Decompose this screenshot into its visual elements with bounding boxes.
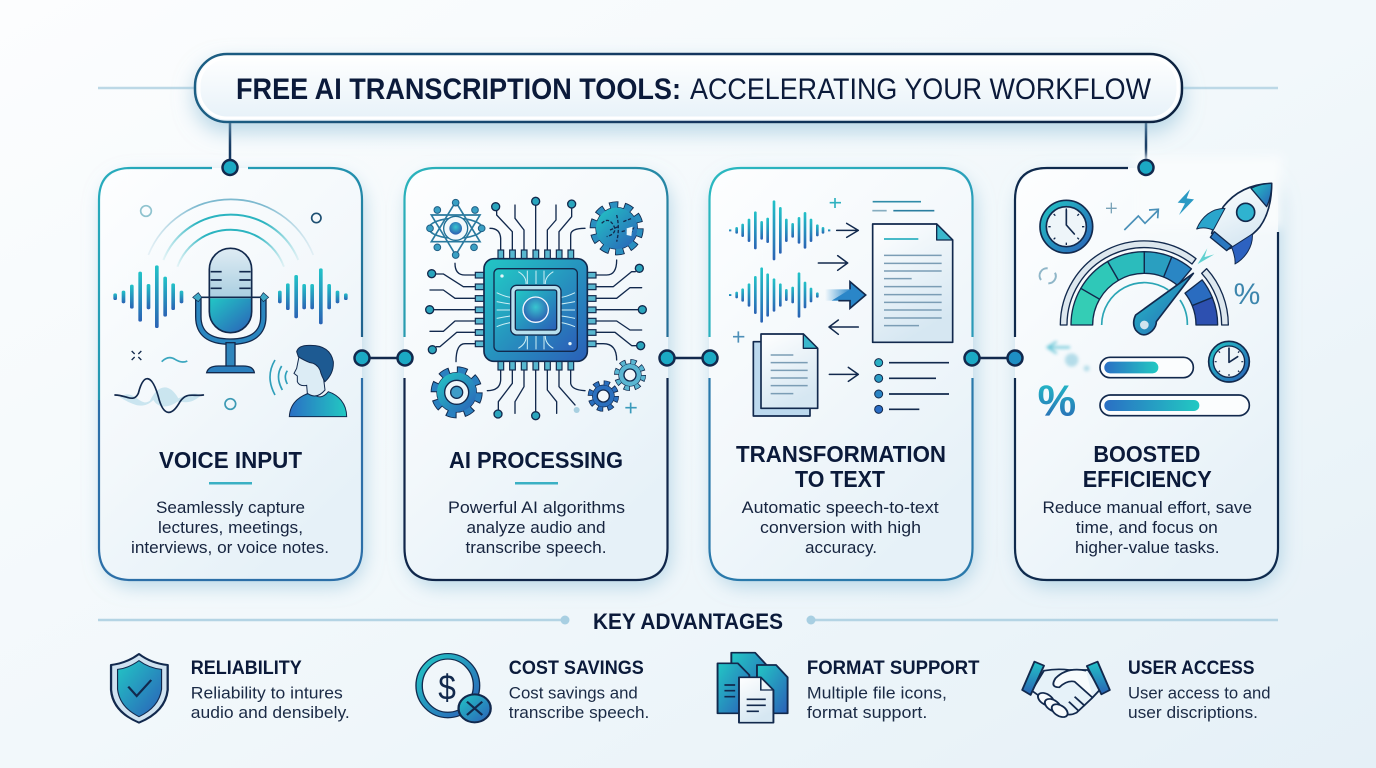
text: FORMAT SUPPORT bbox=[807, 658, 980, 679]
accent rule bbox=[515, 482, 558, 484]
text: audio and densibely. bbox=[191, 704, 350, 722]
advantage: user access bbox=[1022, 658, 1270, 722]
icon: audio waves converting to documents bbox=[729, 198, 953, 416]
advantage: reliability bbox=[111, 654, 350, 723]
heading: VOICE INPUT bbox=[159, 447, 302, 473]
section heading: key advantages bbox=[98, 609, 1278, 634]
title banner bbox=[98, 54, 1278, 160]
advantage: cost savings bbox=[419, 656, 649, 722]
body text bbox=[448, 499, 625, 557]
text bbox=[191, 658, 350, 722]
title banner: FREE AI TRANSCRIPTION TOOLS: bbox=[236, 73, 681, 106]
heading: TO TEXT bbox=[795, 466, 885, 492]
icon: small gear light bbox=[617, 362, 643, 388]
text: User access to and bbox=[1128, 684, 1270, 702]
body text bbox=[742, 499, 939, 557]
icon: file stack bbox=[718, 653, 788, 723]
icon: coin with cross: $ bbox=[438, 668, 456, 707]
icon: speedometer, rocket, clocks and progress bars bbox=[1038, 183, 1272, 425]
panel: boosted efficiency bbox=[1015, 156, 1282, 580]
title banner: ACCELERATING YOUR WORKFLOW bbox=[690, 73, 1152, 106]
text: RELIABILITY bbox=[191, 658, 302, 679]
text: user discriptions. bbox=[1128, 704, 1258, 722]
icon: speedometer, rocket, clocks and progress bars: % bbox=[1234, 278, 1260, 311]
icon: small gear dark bbox=[590, 383, 616, 409]
text: format support. bbox=[807, 704, 927, 722]
text: COST SAVINGS bbox=[509, 658, 644, 679]
body text: lectures, meetings, bbox=[158, 519, 303, 537]
icon: handshake bbox=[1022, 662, 1110, 720]
heading bbox=[736, 441, 946, 492]
connector dots: top bbox=[222, 160, 1154, 175]
icon: gear with neural pattern bbox=[594, 205, 640, 251]
accent rule bbox=[209, 482, 252, 484]
text: Reliability to intures bbox=[191, 684, 343, 702]
heading: AI PROCESSING bbox=[449, 447, 623, 473]
text bbox=[807, 658, 980, 722]
body text: Powerful AI algorithms bbox=[448, 499, 625, 517]
panel: AI processing bbox=[404, 168, 668, 580]
heading: BOOSTED bbox=[1093, 441, 1200, 467]
body text: Reduce manual effort, save bbox=[1042, 499, 1252, 517]
heading: TRANSFORMATION bbox=[736, 441, 946, 467]
body text: accuracy. bbox=[805, 539, 877, 557]
text: Cost savings and bbox=[509, 684, 638, 702]
icon: coin with cross bbox=[419, 656, 491, 722]
heading bbox=[1083, 441, 1212, 492]
body text: transcribe speech. bbox=[466, 539, 606, 557]
icon: shield bbox=[111, 654, 168, 723]
body text bbox=[1042, 499, 1252, 557]
body text: analyze audio and bbox=[466, 519, 606, 537]
body text: interviews, or voice notes. bbox=[131, 539, 329, 557]
body text: Automatic speech-to-text bbox=[742, 499, 939, 517]
text: Multiple file icons, bbox=[807, 684, 947, 702]
body text: higher-value tasks. bbox=[1075, 539, 1220, 557]
heading: EFFICIENCY bbox=[1083, 466, 1212, 492]
icon: microphone with sound waves and speaker bbox=[113, 199, 348, 417]
connector arrows between panels bbox=[354, 350, 1022, 366]
panel: transformation to text bbox=[709, 168, 973, 580]
body text: conversion with high bbox=[760, 519, 921, 537]
body text: Seamlessly capture bbox=[156, 499, 305, 517]
text bbox=[1128, 658, 1270, 722]
icon: speedometer, rocket, clocks and progress bars: % bbox=[1038, 377, 1076, 425]
body text: time, and focus on bbox=[1076, 519, 1218, 537]
section heading: key advantages: KEY ADVANTAGES bbox=[593, 609, 783, 634]
body text bbox=[131, 499, 329, 557]
text bbox=[509, 658, 649, 722]
panel: voice input bbox=[99, 168, 362, 580]
text: USER ACCESS bbox=[1128, 658, 1254, 679]
advantage: format support bbox=[718, 653, 980, 723]
text: transcribe speech. bbox=[509, 704, 649, 722]
icon: large gear bbox=[435, 370, 479, 414]
icon: AI chip with circuits and gears bbox=[426, 197, 646, 420]
